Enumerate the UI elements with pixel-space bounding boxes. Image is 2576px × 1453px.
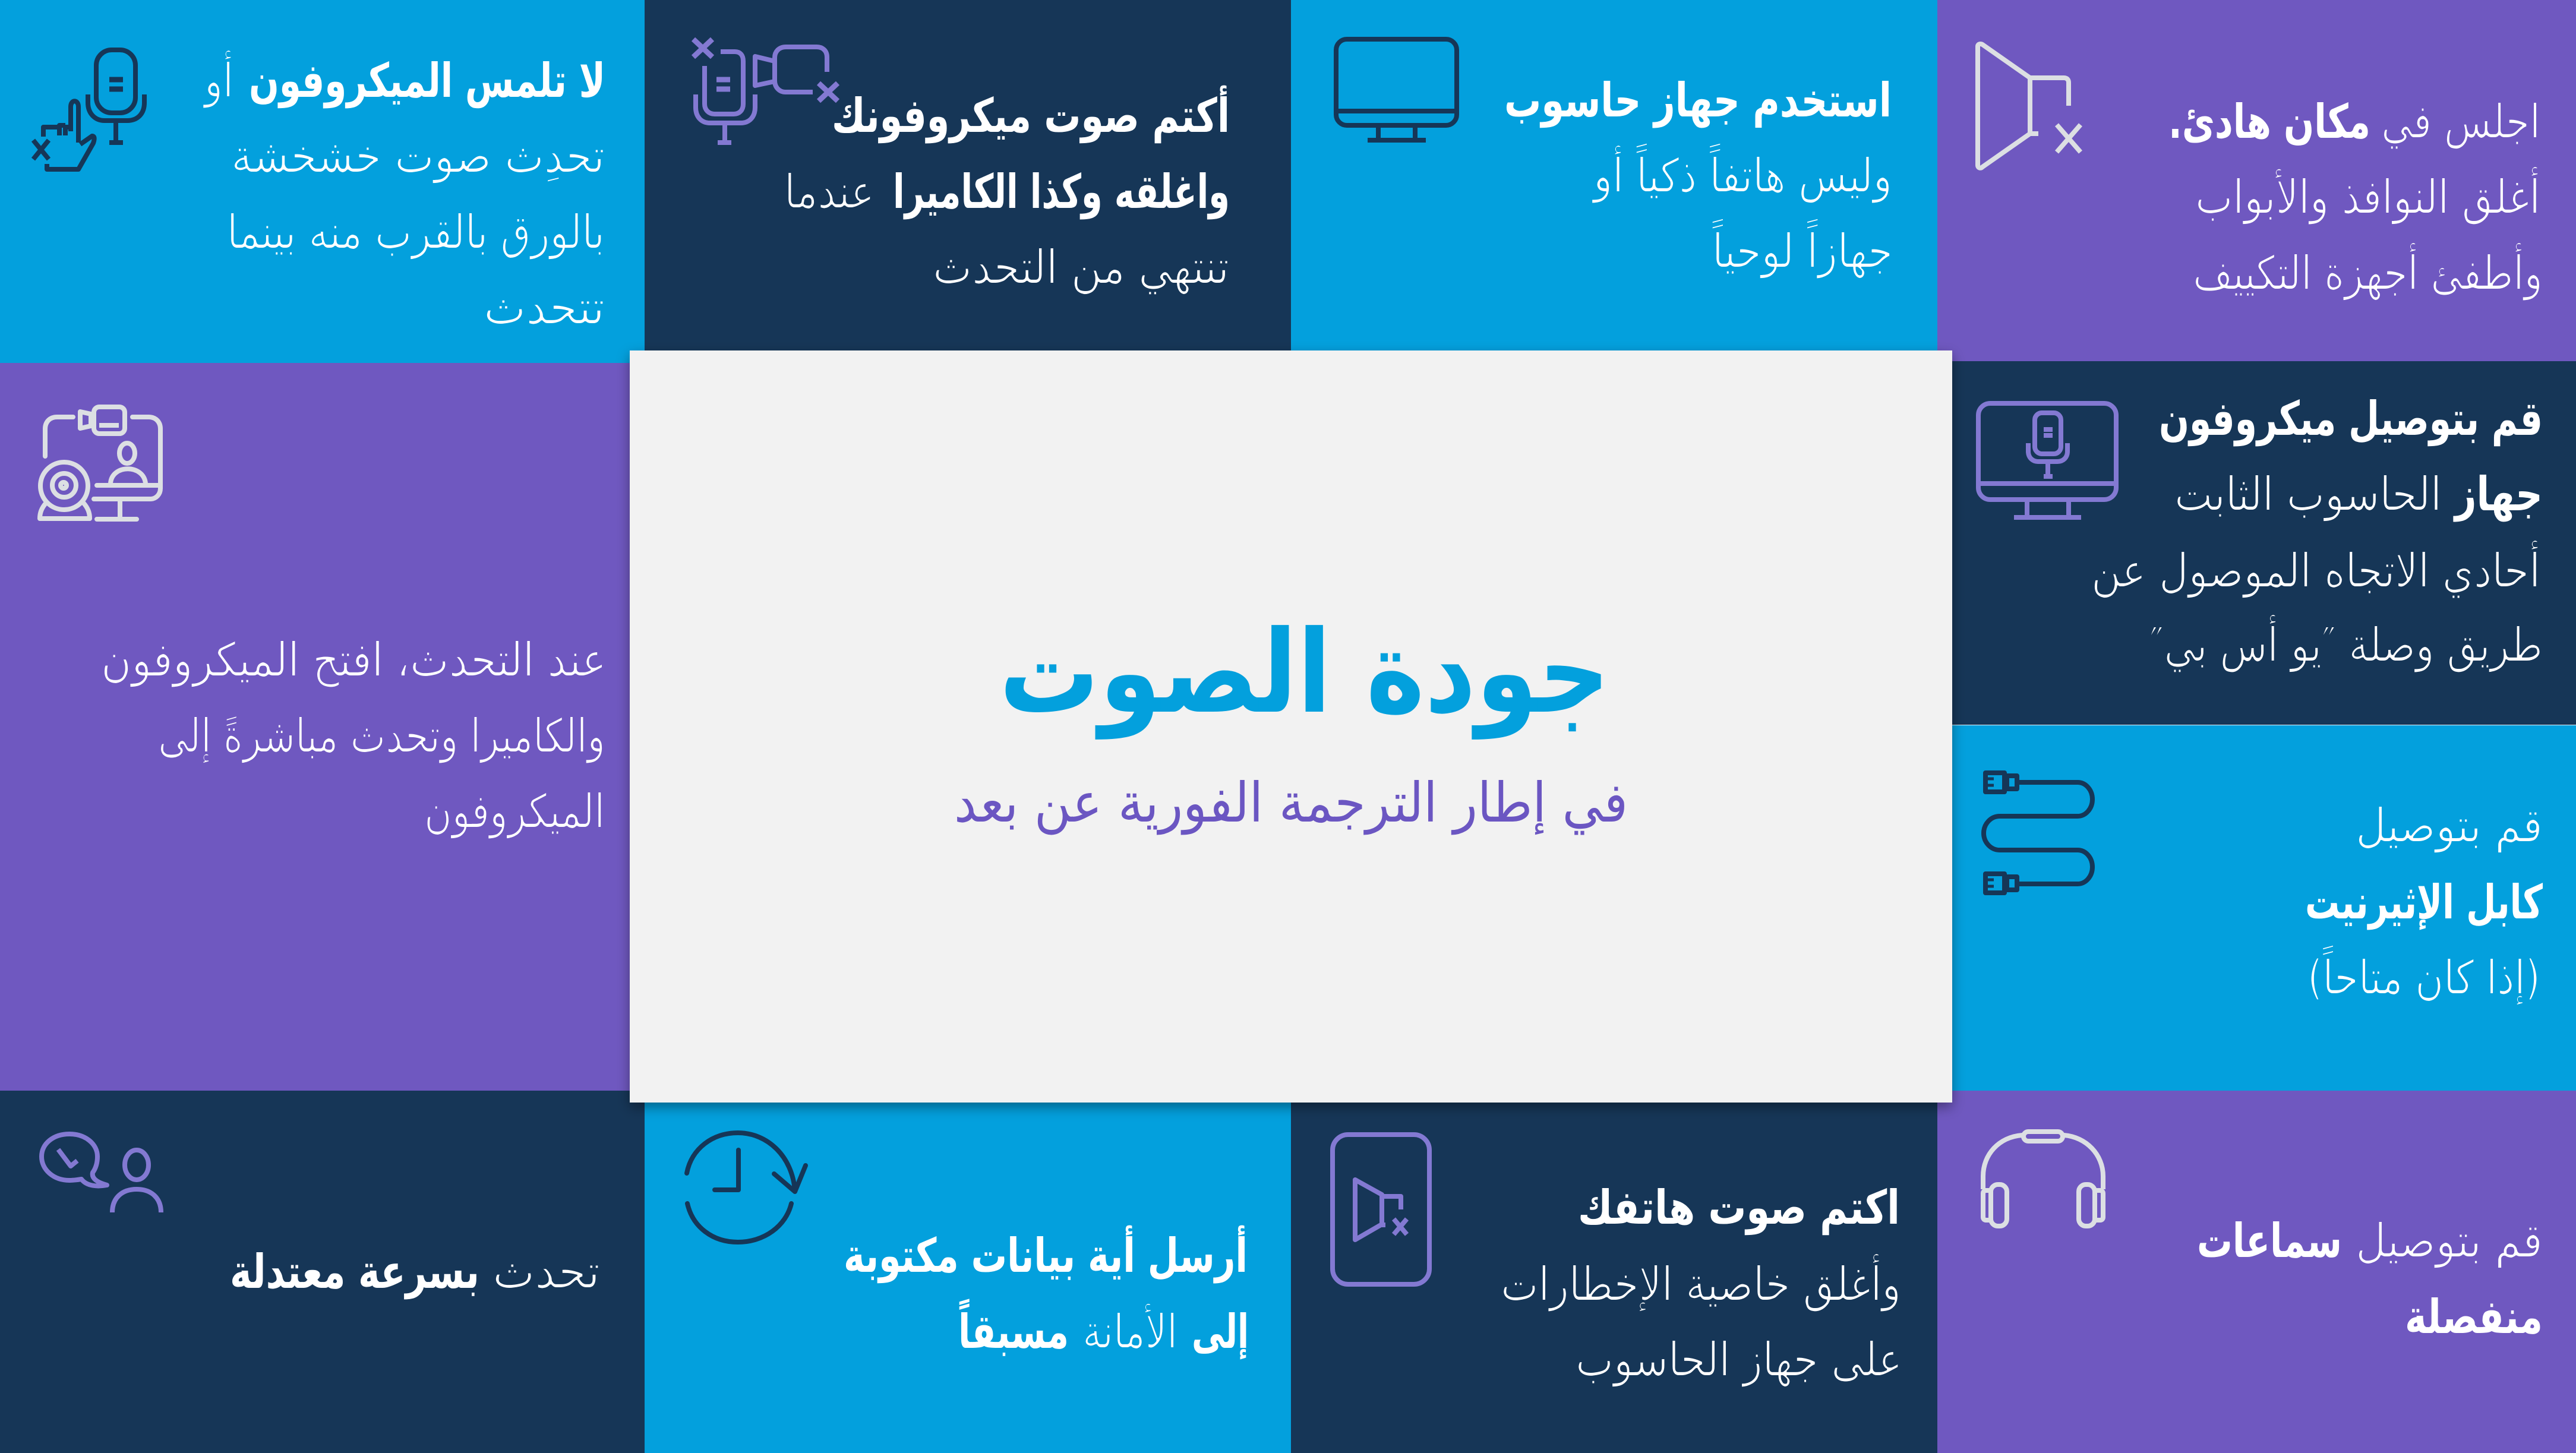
text: written data line 2 bold left: مسبقاً <box>958 1299 1069 1359</box>
panel: speak directly into the microphone <box>0 363 645 1091</box>
text: mute phone line 2: وأغلق خاصية الإخطارات <box>1501 1253 1901 1312</box>
icon: speech bubble clock and person <box>42 1134 161 1212</box>
text: written data line 2 bold right: إلى <box>1192 1304 1249 1360</box>
panel: do not touch the microphone <box>0 0 645 363</box>
text: connect microphone line 2 light: الحاسوب الثابت <box>2174 467 2442 522</box>
text: use computer line 3: جهازاً لوحياً <box>1712 218 1893 279</box>
text: use computer line 1: استخدم جهاز حاسوب <box>1504 73 1892 128</box>
text: mute microphone line 3: تنتهي من التحدث <box>933 240 1229 295</box>
text: headphones line 1 light: قم بتوصيل <box>2356 1214 2543 1269</box>
text: speak directly line 2: والكاميرا وتحدث مباشرةً إلى <box>158 709 605 764</box>
icon: headphones <box>1983 1132 2103 1226</box>
text: headphones line 1 bold: سماعات <box>2197 1214 2342 1268</box>
text: do not touch microphone line 2: تحدِث صوت خشخشة <box>231 129 605 184</box>
icon: ethernet cable <box>1984 773 2092 893</box>
panel: connect a microphone <box>1937 361 2576 725</box>
text: headphones line 2: منفصلة <box>2405 1290 2543 1344</box>
text: mute phone line 1: اكتم صوت هاتفك <box>1578 1180 1900 1236</box>
panel: mute your phone <box>1291 1091 1937 1453</box>
text: written data line 2 light: الأمانة <box>1082 1303 1177 1359</box>
text: speak directly line 3: الميكروفون <box>424 784 605 839</box>
text: mute phone line 3: على جهاز الحاسوب <box>1576 1332 1902 1388</box>
icon: desktop monitor <box>1336 39 1457 140</box>
icon: hand touching microphone <box>33 50 144 169</box>
icon: phone with muted speaker <box>1333 1135 1429 1284</box>
text: mute microphone line 1: أكتم صوت ميكروفونك <box>832 85 1230 144</box>
icon: muted microphone and camera <box>693 39 838 144</box>
text: do not touch microphone line 1 bold: لا تلمس الميكروفون <box>249 53 605 109</box>
panel: mute microphone and camera <box>645 0 1291 363</box>
text: use computer line 2: وليس هاتفاً ذكياً أو <box>1592 143 1892 204</box>
panel: speak at moderate speed <box>0 1091 645 1453</box>
panel: use a computer <box>1291 0 1937 363</box>
icon: webcam and video call <box>40 407 160 519</box>
icon: microphone on monitor <box>1978 403 2116 517</box>
text: do not touch microphone line 3: بالورق بالقرب منه بينما <box>227 205 605 260</box>
text: quiet place line 1 light: اجلس في <box>2381 94 2540 150</box>
text: connect microphone line 2 bold: جهاز <box>2453 467 2543 522</box>
title: جودة الصوت <box>999 607 1610 740</box>
text: ethernet line 1: قم بتوصيل <box>2356 798 2543 854</box>
text: do not touch microphone line 1 light: أو <box>203 50 233 109</box>
panel: connect headphones <box>1937 1091 2576 1453</box>
subtitle: في إطار الترجمة الفورية عن بعد <box>954 771 1628 835</box>
panel: send written data in advance <box>645 1091 1291 1453</box>
text: moderate speed light: تحدث <box>493 1244 600 1299</box>
text: do not touch microphone line 4: تتحدث <box>484 280 605 335</box>
text: quiet place line 1 bold: مكان هادئ. <box>2168 94 2370 149</box>
text: written data line 1: أرسل أية بيانات مكتوبة <box>844 1225 1248 1283</box>
panel: centre title card <box>630 350 1952 1103</box>
panel: ethernet cable <box>1937 725 2576 1091</box>
text: moderate speed bold: بسرعة معتدلة <box>230 1244 479 1299</box>
icon: clock with arrow <box>687 1133 806 1242</box>
panel: sit in a quiet place <box>1937 0 2576 362</box>
text: mute microphone line 2 bold: واغلقه وكذا الكاميرا <box>893 165 1230 220</box>
icon: muted speaker <box>1978 44 2081 168</box>
text: speak directly line 1: عند التحدث، افتح الميكروفون <box>101 633 607 688</box>
text: mute microphone line 2 light: عندما <box>784 165 875 219</box>
